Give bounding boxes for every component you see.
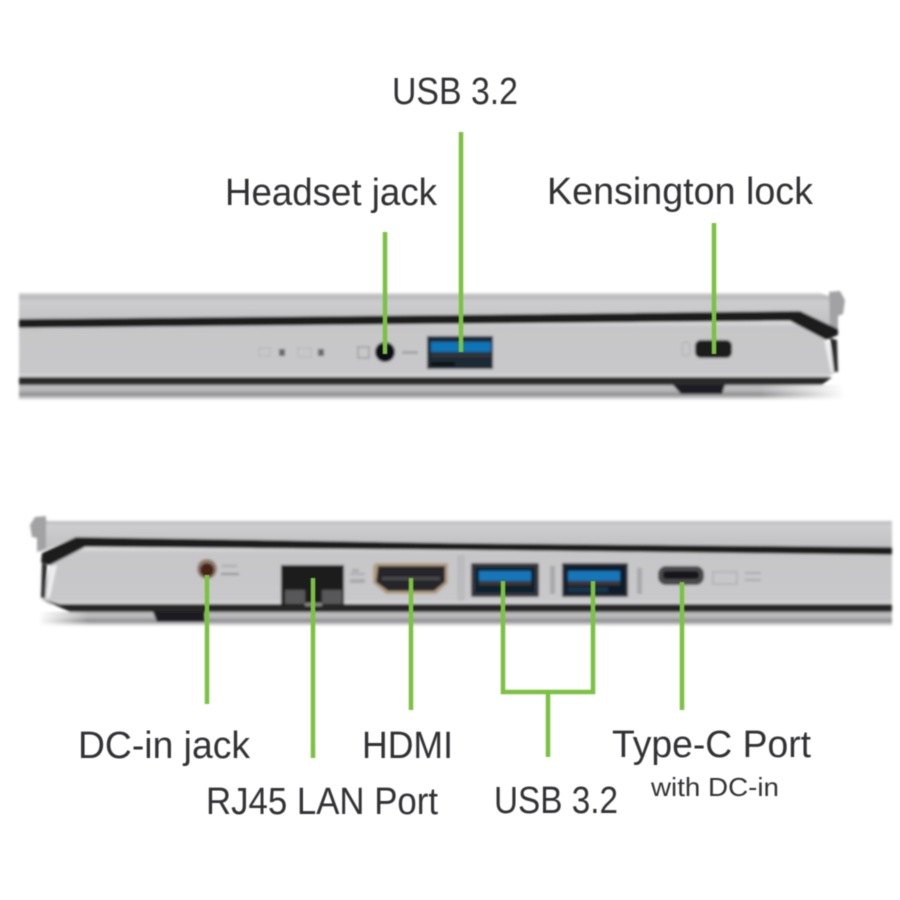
lid (39, 517, 892, 552)
headset jack port (375, 342, 395, 362)
bottom dark edge (19, 377, 832, 385)
dark gap (19, 311, 838, 340)
bottom dark edge (44, 600, 892, 612)
leader lines (207, 132, 714, 758)
label: RJ45 LAN Port: RJ45 LAN Port (206, 781, 438, 823)
hinge (30, 516, 46, 552)
label: Headset jack: Headset jack (225, 172, 438, 214)
line: top USB 3.2 (459, 132, 463, 352)
line: headset jack (383, 232, 387, 354)
USB 3.2 port 1 (471, 563, 539, 597)
label: DC-in jack: DC-in jack (78, 725, 251, 767)
laptop: left side view (30, 516, 892, 627)
line: Kensington lock (712, 223, 716, 354)
label: USB 3.2 bottom: USB 3.2 (494, 780, 618, 822)
line: HDMI (409, 578, 413, 710)
rubber foot (153, 612, 205, 622)
dark gap (41, 537, 892, 566)
port markings (221, 556, 761, 600)
HDMI port (373, 563, 448, 594)
lid (19, 293, 838, 329)
line: DC-in jack (205, 575, 209, 704)
port markings (259, 342, 690, 358)
base (19, 321, 836, 378)
shadow under laptop (40, 612, 892, 626)
RJ45 LAN port (281, 565, 344, 606)
hinge (829, 291, 845, 329)
label: HDMI: HDMI (362, 725, 453, 767)
shadow under laptop (19, 385, 844, 400)
label: USB 3.2 top: USB 3.2 (392, 71, 518, 113)
DC-in jack port (197, 559, 217, 579)
rubber foot (673, 385, 725, 394)
label: Kensington lock: Kensington lock (547, 171, 814, 213)
label: Type-C Port: Type-C Port (612, 724, 811, 766)
laptop: right side view (19, 291, 845, 401)
USB 3.2 port (427, 336, 493, 369)
Kensington lock port (695, 340, 732, 358)
Type-C port (658, 566, 704, 585)
base (42, 547, 892, 605)
line: RJ45 LAN port (311, 578, 315, 758)
line: Type-C port (680, 582, 684, 710)
USB 3.2 port 2 (562, 563, 628, 597)
bracket: bottom USB 3.2 (503, 581, 593, 757)
label: with DC-in: with DC-in (650, 772, 779, 802)
labels (78, 71, 814, 823)
